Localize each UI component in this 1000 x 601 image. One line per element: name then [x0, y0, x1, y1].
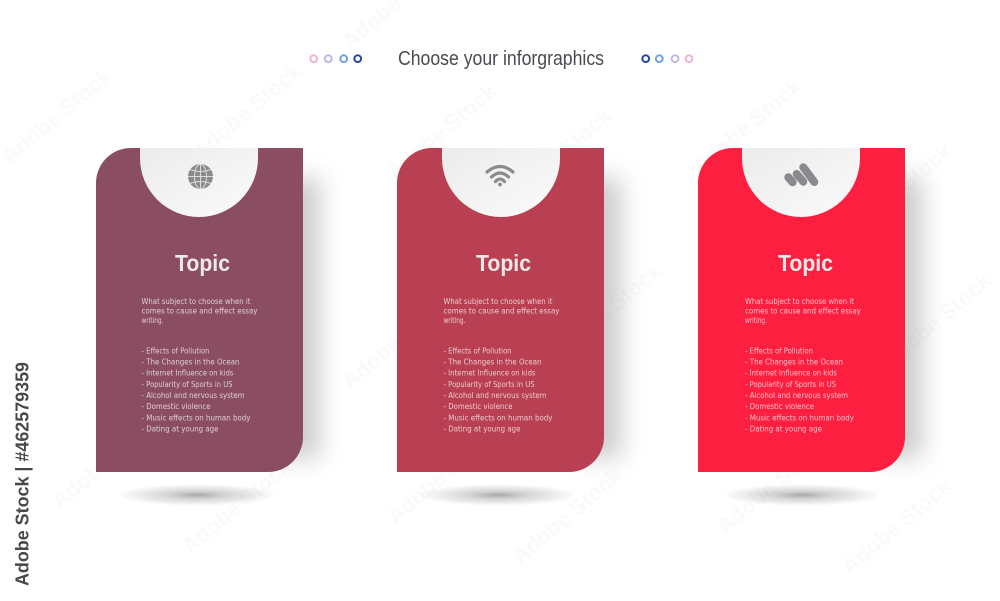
- stock id side label: Adobe Stock | #462579359: [12, 362, 32, 586]
- card 3 description: writing.: [745, 316, 767, 325]
- panel: card 2: [397, 148, 621, 506]
- watermark layer: Adobe Stock: [187, 58, 307, 164]
- card 1 list: - Effects of Pollution: [142, 346, 210, 356]
- card 3 description: [745, 297, 861, 325]
- card 2 list: - Dating at young age: [444, 424, 521, 434]
- icon: wifi: [487, 166, 513, 186]
- card 1 side shadow: [278, 178, 320, 458]
- card 2 description: [444, 297, 560, 325]
- card 1 description: What subject to choose when it: [142, 297, 251, 306]
- card 2 side shadow: [579, 178, 621, 458]
- watermark layer: Adobe Stock: [687, 73, 807, 179]
- card 3 notch: [742, 148, 860, 217]
- icon: globe: [188, 164, 213, 189]
- panel: card 3: [698, 148, 922, 506]
- card 2 list: - Effects of Pollution: [444, 346, 512, 356]
- card 2 list: - Alcohol and nervous system: [444, 391, 546, 400]
- watermark layer: Adobe Stock: [337, 288, 457, 394]
- card 1 list: - Internet Influence on kids: [142, 369, 234, 378]
- watermark layer: Adobe Stock: [877, 268, 997, 374]
- card 3 heading: Topic: [778, 250, 833, 276]
- watermark layer: Adobe Stock: [712, 433, 832, 539]
- watermark layer: Adobe Stock: [497, 103, 617, 209]
- watermark layer: Adobe Stock: [837, 138, 957, 244]
- card 2 notch: [442, 148, 560, 217]
- card 1 description: writing.: [142, 316, 164, 325]
- card 1 list: - Popularity of Sports in US: [142, 380, 233, 389]
- card 3 list: - Alcohol and nervous system: [745, 391, 848, 400]
- card 3 side shadow: [880, 178, 922, 458]
- card 2 description: writing.: [444, 316, 466, 325]
- card 1 list: [142, 346, 251, 434]
- card 1 list: - Dating at young age: [142, 424, 219, 434]
- card 3 list: - The Changes in the Ocean: [745, 358, 843, 366]
- watermark layer: Adobe Stock: [47, 408, 167, 514]
- card 2 list: - Domestic violence: [444, 402, 513, 411]
- card 2 description: comes to cause and effect essay: [444, 306, 560, 316]
- card 3 list: - Domestic violence: [745, 402, 814, 411]
- card 2 list: [444, 346, 553, 434]
- card 1 description: comes to cause and effect essay: [142, 306, 258, 316]
- card 3 list: - Music effects on human body: [745, 413, 854, 422]
- card 1 list: - Alcohol and nervous system: [142, 391, 244, 400]
- card 3 list: - Popularity of Sports in US: [745, 380, 836, 389]
- card 1 list: - Music effects on human body: [142, 413, 251, 422]
- panel: card 1: [96, 148, 320, 506]
- left dots: [310, 55, 361, 62]
- icon: brand mark: [788, 167, 814, 182]
- card 1 background: [96, 148, 303, 472]
- card 2 heading: Topic: [476, 250, 531, 276]
- card 2 list: - Music effects on human body: [444, 413, 553, 422]
- card 3 list: - Effects of Pollution: [745, 346, 813, 356]
- card 1 list: - Domestic violence: [142, 402, 211, 411]
- watermark layer: Adobe Stock: [382, 423, 502, 529]
- watermark layer: Adobe Stock: [177, 453, 297, 559]
- card 3 list: [745, 346, 854, 434]
- watermark layer: Adobe Stock: [547, 258, 667, 364]
- right dots: [642, 55, 692, 62]
- card 2 background: [397, 148, 604, 472]
- card 1 list: - The Changes in the Ocean: [142, 358, 240, 366]
- card 2 ground shadow: [418, 484, 578, 506]
- card 1 description: [142, 297, 258, 325]
- title: Choose your inforgraphics: [398, 48, 604, 70]
- watermark layer: Adobe Stock: [837, 473, 957, 579]
- card 2 list: - Popularity of Sports in US: [444, 380, 535, 389]
- card 3 list: - Internet Influence on kids: [745, 369, 837, 378]
- card 1 notch: [140, 148, 258, 217]
- card 3 background: [698, 148, 905, 472]
- card 1 heading: Topic: [175, 250, 230, 276]
- card 2 list: - Internet Influence on kids: [444, 369, 536, 378]
- card 1 ground shadow: [117, 484, 277, 506]
- card 3 description: comes to cause and effect essay: [745, 306, 861, 316]
- card 2 list: - The Changes in the Ocean: [444, 358, 542, 366]
- card 3 description: What subject to choose when it: [745, 297, 854, 306]
- card 3 ground shadow: [722, 484, 882, 506]
- card 3 list: - Dating at young age: [745, 424, 822, 434]
- watermark layer: Adobe Stock: [0, 63, 117, 169]
- card 2 description: What subject to choose when it: [444, 297, 553, 306]
- watermark layer: Adobe Stock: [382, 78, 502, 184]
- watermark layer: Adobe Stock: [507, 463, 627, 569]
